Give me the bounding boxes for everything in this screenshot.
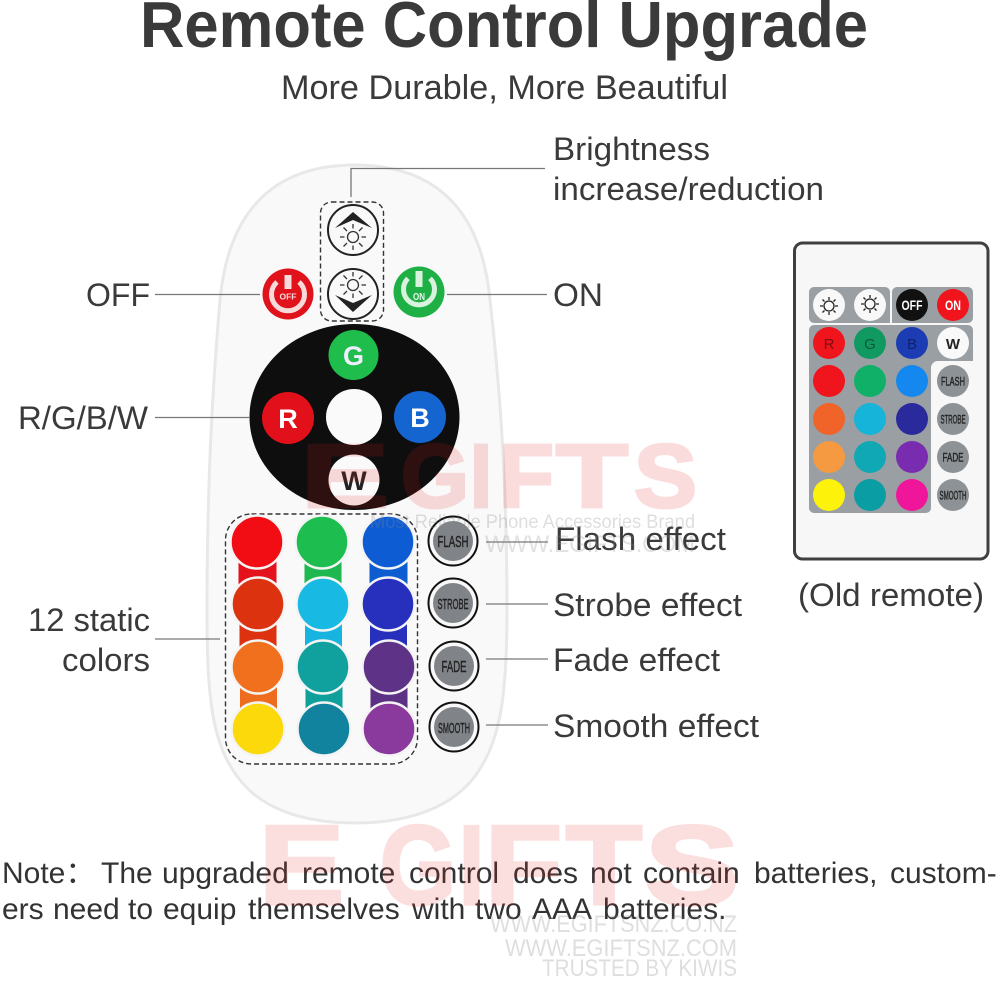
note text: ers [2,893,44,926]
watermark: bottom: TRUSTED BY KIWIS [542,955,737,982]
old remote top buttons: ON [945,297,961,313]
note text: upgraded [162,857,289,890]
old remote body [794,243,988,559]
old remote top buttons: OFF [902,297,923,313]
RGBW colour wheel: W [341,466,367,496]
effect buttons [428,516,478,752]
callout: brightness [351,131,824,207]
watermark: bottom: I [459,803,484,928]
note text: to [128,893,153,926]
callout: OFF: OFF [86,277,150,313]
callout: brightness: Brightness [553,131,710,167]
callout: flash effect: Flash effect [555,521,726,557]
subtitle: More Durable, More Beautiful [281,69,728,107]
note text: Note： [2,857,95,890]
effect buttons: FADE [442,659,466,676]
note text: two [475,893,522,926]
old remote colour buttons: B [907,336,917,353]
old remote [794,243,988,559]
watermark: bottom: G [380,803,456,928]
callout: 12 static colors: 12 static [28,602,150,638]
OFF button: OFF [280,292,296,302]
callout: 12 static colors: colors [62,642,150,678]
watermark: middle: Most Reliable Phone Accessories Brand [370,512,695,533]
old remote effect buttons: STROBE [940,412,966,426]
callout: 12 static colors [28,602,220,678]
callout: smooth effect: Smooth effect [553,708,759,744]
remote body [207,165,507,823]
old remote colour buttons: W [946,336,961,353]
ON button [394,266,444,318]
note text [2,857,997,926]
callout: fade effect: Fade effect [553,642,720,678]
old remote caption: (Old remote) [798,577,984,613]
watermark: bottom: T [566,803,642,928]
note text: control [409,857,499,890]
note text: custom- [890,857,997,890]
note text: with [411,893,465,926]
note text: does [513,857,578,890]
old remote effect buttons: SMOOTH [940,488,966,502]
old remote effect buttons [937,365,969,511]
RGBW colour wheel: R [278,404,298,434]
effect buttons: FLASH [438,534,468,551]
RGBW colour wheel: G [343,341,364,371]
old remote top buttons [813,289,969,321]
watermark: middle: I [470,427,492,527]
watermark: middle: G [401,427,469,527]
watermark: bottom: E [259,803,344,928]
OFF button [262,268,314,320]
old remote colour buttons [813,327,969,511]
old remote grey panels [809,287,973,513]
watermark: middle [301,427,697,558]
callout: strobe effect: Strobe effect [553,587,742,623]
watermark: middle: S [634,427,697,527]
effect buttons: SMOOTH [438,720,470,737]
old remote colour buttons: R [824,336,835,353]
note text: need [53,893,120,926]
note text: The [101,857,153,890]
watermark: bottom: WWW.EGIFTSNZ.CO.NZ [490,911,737,938]
callout: brightness: increase/reduction [553,171,824,207]
watermark: bottom: WWW.EGIFTSNZ.COM [505,935,737,962]
watermark: middle: F [499,427,554,527]
note text: batteries, [754,857,877,890]
old remote effect buttons: FADE [942,450,964,464]
callout: ON: ON [553,277,603,313]
effect buttons: STROBE [438,596,468,613]
note text: AAA [532,893,592,926]
note text: not [590,857,632,890]
watermark: bottom [259,803,739,982]
old remote colour buttons: G [864,336,876,353]
brightness button group [320,202,384,321]
ON button: ON [413,292,425,303]
RGBW colour wheel [250,324,460,510]
callout: RGBW: R/G/B/W [18,400,149,436]
note text: contain [643,857,740,890]
note text: themselves [248,893,400,926]
watermark: bottom: F [485,803,562,928]
RGBW colour wheel: B [410,403,430,433]
watermark: middle: T [556,427,628,527]
watermark: middle: E [301,427,389,527]
watermark: bottom: S [645,803,739,928]
static colour grid [226,514,418,764]
note text: equip [163,893,236,926]
note text: remote [302,857,395,890]
watermark: middle: WWW.EGIFTS.COM [485,531,695,558]
upgraded remote control [207,165,507,823]
old remote effect buttons: FLASH [941,374,965,388]
note text: batteries. [603,893,726,926]
